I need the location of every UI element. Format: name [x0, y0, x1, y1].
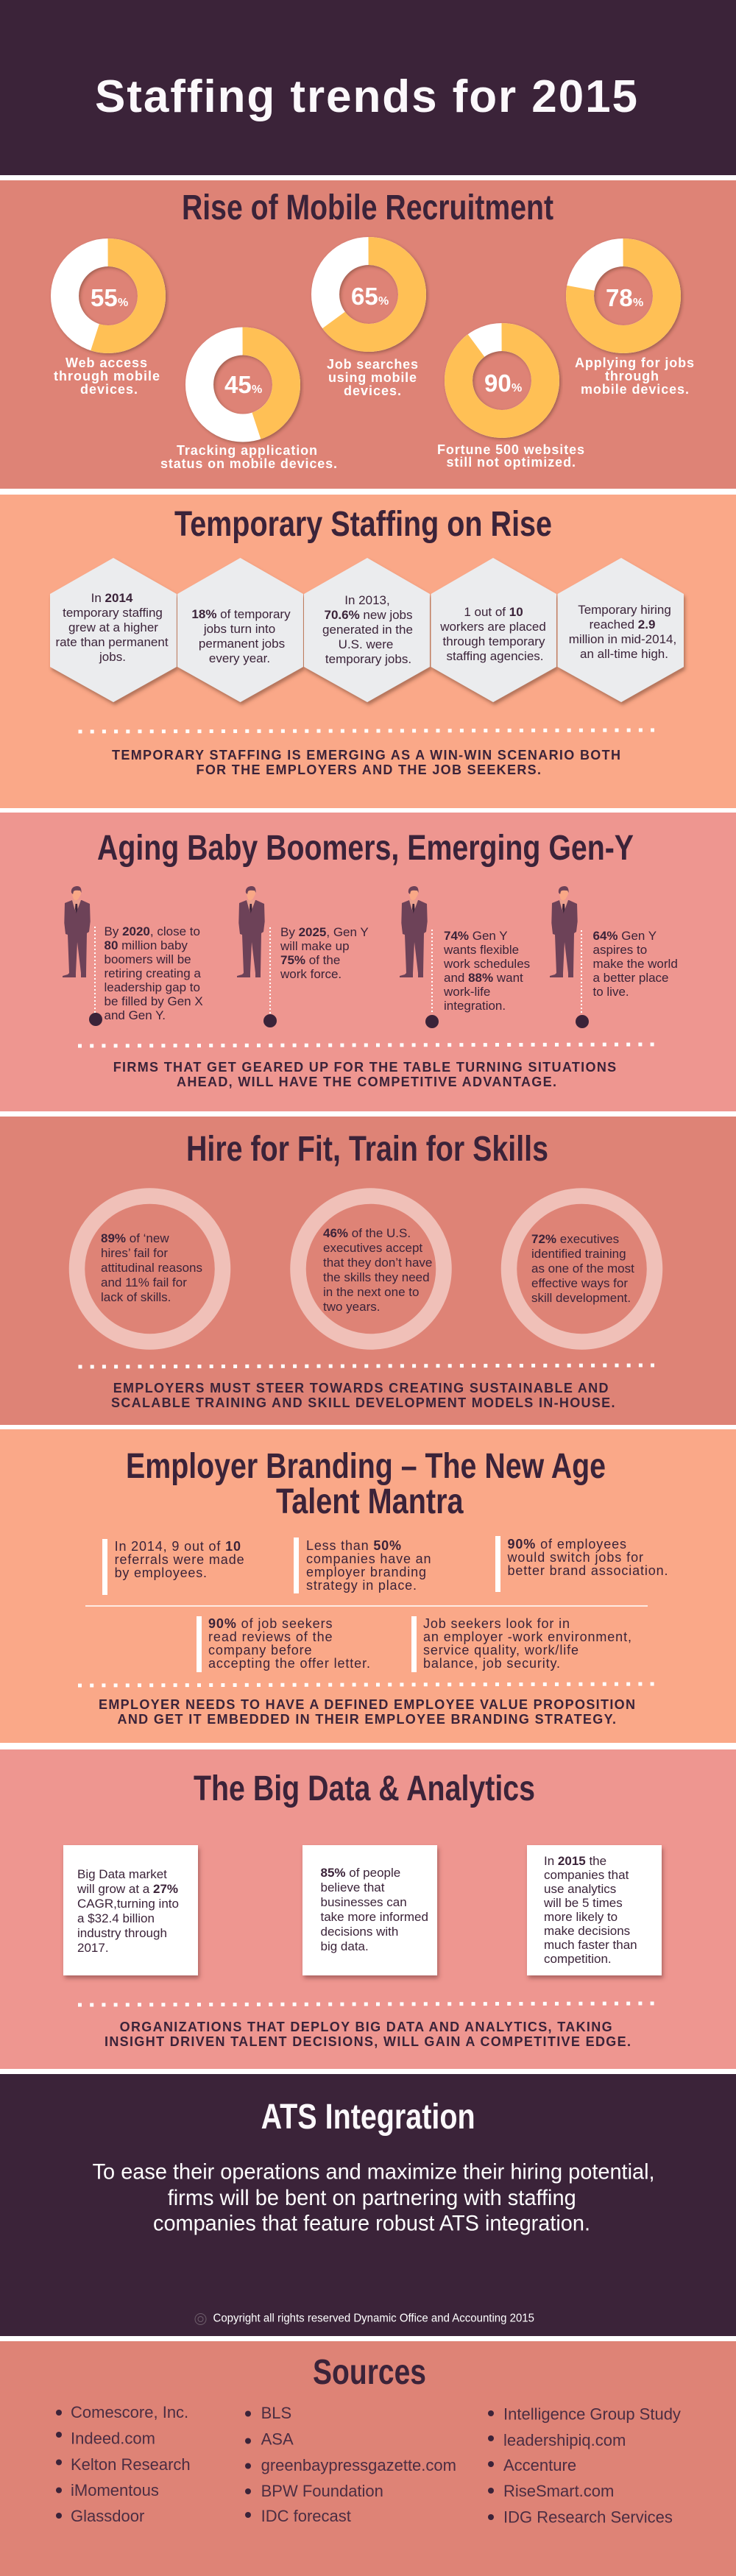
label: web access: through mobile	[54, 369, 160, 383]
hexagon: 1 out of 10: through temporary	[443, 634, 545, 648]
donut: 45 percent: %	[252, 383, 262, 396]
icon: man	[400, 886, 428, 977]
label: fortune 500: Fortune 500 websites	[437, 442, 584, 457]
ring stat: 46 percent: executives accept	[323, 1241, 422, 1255]
card: 2015 companies: will be 5 times	[543, 1896, 623, 1910]
heading: Aging Baby Boomers, Emerging Gen-Y	[97, 829, 634, 868]
person 1 with stat: be filled by Gen X	[105, 994, 203, 1008]
icon: man	[237, 886, 265, 977]
heading: Temporary Staffing on Rise	[174, 505, 552, 544]
stat: switch jobs: 90% of employees	[508, 1537, 626, 1551]
card: big data market: CAGR,turning into	[77, 1897, 179, 1911]
hexagon: 2014: temporary staffing	[63, 606, 163, 620]
source list: column 3: Intelligence Group Study	[503, 2405, 681, 2423]
panel: hire for fit	[0, 1117, 736, 1425]
card: 2015 companies: use analytics	[544, 1882, 616, 1896]
person 3 with stat: work schedules	[443, 957, 530, 971]
takeaway text: FIRMS THAT GET GEARED UP FOR THE TABLE TURNING SITUATIONS	[113, 1060, 616, 1075]
donut: 78 percent: 78	[606, 284, 633, 311]
hexagon: 1 out of 10: 1 out of 10	[464, 605, 523, 619]
label: tracking application: status on mobile devices.	[160, 456, 337, 471]
hexagon: 2.9 million: million in mid-2014,	[569, 632, 676, 646]
donut: 90 percent	[459, 337, 545, 424]
person 1 with stat	[63, 886, 203, 1026]
hexagon: 18 percent	[177, 558, 303, 702]
takeaway text: AND GET IT EMBEDDED IN THEIR EMPLOYEE BRANDING STRATEGY.	[118, 1712, 616, 1727]
hexagon: 2.9 million	[558, 558, 684, 702]
donut: 78 percent: %	[633, 297, 643, 309]
stat: job seekers look for: service quality, work/life	[423, 1643, 578, 1657]
ring stat: 89 percent	[77, 1196, 222, 1342]
stat: job seekers look for: an employer -work environment,	[423, 1630, 631, 1644]
ring stat: 89 percent: attitudinal reasons	[101, 1261, 202, 1275]
card: 85 percent: take more informed	[321, 1910, 428, 1924]
hexagon: 2014: rate than permanent	[55, 635, 169, 649]
card: 2015 companies: In 2015 the	[544, 1854, 606, 1868]
heading: Hire for Fit, Train for Skills	[186, 1130, 548, 1169]
ring stat: 89 percent: 89% of ‘new	[101, 1231, 169, 1245]
card: big data market	[63, 1845, 198, 1975]
icon: man	[550, 886, 578, 977]
card: big data market: Big Data market	[77, 1867, 167, 1881]
paragraph	[93, 2159, 655, 2236]
stat: employer branding strategy	[294, 1538, 431, 1593]
stat: employer branding strategy: strategy in place.	[306, 1578, 417, 1593]
card: 2015 companies: make decisions	[544, 1924, 630, 1938]
hexagon: 1 out of 10	[431, 558, 556, 702]
hexagon: 18 percent: permanent jobs	[199, 637, 285, 651]
stat: read reviews: read reviews of the	[208, 1630, 333, 1644]
panel: sources	[0, 2341, 736, 2576]
person 3 with stat: wants flexible	[443, 943, 519, 957]
hexagon: 2014	[50, 558, 177, 702]
person 3 with stat: integration.	[444, 999, 506, 1013]
copyright: Copyright all rights reserved Dynamic Office and Accounting 2015	[213, 2313, 534, 2325]
icon: man	[63, 886, 91, 977]
takeaway text: INSIGHT DRIVEN TALENT DECISIONS, WILL GAIN A COMPETITIVE EDGE.	[105, 2034, 631, 2049]
hexagon: 2014: In 2014	[91, 591, 133, 605]
card: 2015 companies: much faster than	[544, 1938, 637, 1952]
label: web access: devices.	[80, 382, 138, 397]
card: big data market: industry through	[77, 1926, 167, 1940]
paragraph: To ease their operations and maximize their hiring potential,	[93, 2159, 655, 2184]
ring stat: 89 percent: hires’ fail for	[101, 1246, 168, 1260]
heading: ATS Integration	[261, 2098, 475, 2137]
hexagon: 18 percent: every year.	[209, 651, 270, 665]
panel: rise of mobile recruitment	[0, 180, 736, 489]
stat: job seekers look for: balance, job security.	[423, 1656, 560, 1671]
label: job searches: Job searches	[327, 357, 418, 372]
hexagon: 18 percent: 18% of temporary	[191, 607, 291, 621]
card: 85 percent	[302, 1845, 437, 1975]
donut: 45 percent: 45	[224, 371, 252, 398]
hexagon: 1 out of 10: workers are placed	[439, 620, 546, 634]
person 3 with stat: and 88% want	[444, 971, 523, 985]
takeaway text: AHEAD, WILL HAVE THE COMPETITIVE ADVANTAGE.	[177, 1075, 556, 1089]
stat: read reviews: accepting the offer letter.	[208, 1656, 370, 1671]
heading: Employer Branding – The New Age	[126, 1447, 606, 1486]
person 2 with stat: By 2025, Gen Y	[280, 925, 369, 939]
card: big data market: will grow at a 27%	[77, 1882, 178, 1896]
label: applying for jobs: mobile devices.	[581, 382, 689, 397]
takeaway text: EMPLOYERS MUST STEER TOWARDS CREATING SUSTAINABLE AND	[113, 1381, 608, 1395]
title: Staffing trends for 2015	[95, 71, 637, 122]
label: tracking application: Tracking application	[177, 443, 317, 458]
ring stat: 72 percent: 72% executives	[531, 1232, 619, 1246]
takeaway text	[111, 1381, 615, 1410]
person 4 with stat: make the world	[593, 957, 678, 971]
stat: employer branding strategy: companies have an	[306, 1551, 431, 1566]
stat: switch jobs: would switch jobs for	[506, 1550, 643, 1565]
source list: column 1: Comescore, Inc.	[71, 2403, 188, 2421]
label: applying for jobs: through	[605, 369, 659, 383]
heading: The Big Data & Analytics	[194, 1769, 535, 1808]
paragraph: companies that feature robust ATS integration.	[153, 2211, 590, 2236]
panel: big data and analytics	[0, 1749, 736, 2069]
ring stat: 46 percent	[298, 1196, 444, 1342]
donut: 45 percent	[199, 342, 286, 428]
label: job searches: devices.	[344, 383, 401, 398]
hexagon: 70.6 percent: generated in the	[322, 623, 413, 637]
person 4 with stat	[550, 886, 678, 1028]
person 2 with stat: 75% of the	[280, 953, 340, 967]
label: tracking application	[160, 443, 337, 471]
card: 2015 companies: more likely to	[544, 1910, 618, 1924]
person 1 with stat: By 2020, close to	[105, 924, 200, 938]
hexagon: 2.9 million: reached 2.9	[590, 618, 655, 631]
hexagon: 1 out of 10: staffing agencies.	[446, 649, 543, 663]
ring stat: 72 percent: identified training	[531, 1247, 626, 1261]
source list: column 1: iMomentous	[71, 2481, 159, 2499]
ring stat: 46 percent: the skills they need	[323, 1270, 430, 1284]
ring stat: 89 percent: lack of skills.	[101, 1290, 171, 1304]
person 1 with stat: retiring creating a	[105, 966, 201, 980]
stat: job seekers look for	[411, 1616, 631, 1672]
label: job searches	[327, 357, 418, 398]
donut: 65 percent: 65	[351, 283, 378, 310]
panel: temporary staffing	[0, 495, 736, 808]
hexagon: 2014: jobs.	[99, 650, 126, 664]
source list: column 3: IDG Research Services	[503, 2508, 673, 2526]
label: job searches: using mobile	[328, 370, 417, 385]
panel: ats integration	[0, 2074, 736, 2336]
takeaway text: SCALABLE TRAINING AND SKILL DEVELOPMENT MODELS IN-HOUSE.	[111, 1395, 615, 1410]
person 4 with stat: to live.	[593, 985, 629, 999]
source list: column 2: ASA	[261, 2430, 294, 2448]
source list: column 3	[488, 2405, 681, 2526]
ring stat: 72 percent	[509, 1196, 655, 1342]
takeaway text	[105, 2020, 631, 2049]
person 2 with stat	[237, 886, 369, 1027]
ring stat: 46 percent: two years.	[323, 1300, 380, 1314]
ring stat: 46 percent: 46% of the U.S.	[323, 1226, 411, 1240]
source list: column 3: RiseSmart.com	[503, 2482, 614, 2500]
source list: column 3: leadershipiq.com	[503, 2431, 626, 2449]
stat: referrals: by employees.	[115, 1565, 207, 1580]
heading: Sources	[313, 2353, 426, 2392]
label: fortune 500	[437, 442, 584, 470]
panel: aging baby boomers	[0, 813, 736, 1111]
card: 85 percent: 85% of people	[321, 1866, 400, 1880]
donut: 55 percent	[65, 252, 152, 339]
stat: referrals	[102, 1539, 244, 1595]
ring stat: 46 percent: that they don’t have	[323, 1256, 432, 1270]
donut: 55 percent: %	[118, 297, 128, 309]
takeaway text	[113, 1060, 616, 1089]
stat: read reviews	[197, 1616, 370, 1672]
person 3 with stat: work-life	[443, 985, 490, 999]
source list: column 2: BLS	[261, 2404, 291, 2422]
panel: employer branding	[0, 1429, 736, 1743]
label: web access: Web access	[66, 355, 147, 370]
source list: column 1: Glassdoor	[71, 2507, 144, 2525]
hexagon: 2.9 million: an all-time high.	[580, 647, 668, 661]
source list: column 2: IDC forecast	[261, 2507, 351, 2525]
person 1 with stat: leadership gap to	[105, 980, 200, 994]
label: fortune 500: still not optimized.	[446, 455, 576, 470]
paragraph: firms will be bent on partnering with staffing	[168, 2186, 576, 2210]
card: big data market: a $32.4 billion	[77, 1911, 155, 1925]
source list: column 2: greenbaypressgazette.com	[261, 2456, 456, 2474]
source list: column 3: Accenture	[503, 2456, 576, 2474]
person 2 with stat: work force.	[280, 967, 342, 981]
hexagon: 70.6 percent: U.S. were	[339, 637, 393, 651]
donut: 90 percent: %	[512, 382, 522, 394]
stat: employer branding strategy: employer branding	[306, 1565, 426, 1579]
stat: referrals: In 2014, 9 out of 10	[115, 1539, 241, 1554]
person 1 with stat: boomers will be	[105, 952, 191, 966]
ring stat: 72 percent: as one of the most	[531, 1262, 634, 1275]
ring stat: 89 percent: and 11% fail for	[101, 1275, 187, 1289]
stat: switch jobs	[495, 1536, 668, 1592]
takeaway text	[112, 748, 620, 777]
stat: switch jobs: better brand association.	[508, 1563, 668, 1578]
donut: 65 percent	[325, 251, 412, 338]
person 1 with stat: 80 million baby	[105, 938, 188, 952]
card: 85 percent: big data.	[321, 1939, 369, 1953]
hexagon: 2014: grew at a higher	[68, 620, 158, 634]
label: applying for jobs	[575, 355, 694, 397]
source list: column 1	[56, 2403, 191, 2525]
ring stat: 72 percent: effective ways for	[531, 1276, 628, 1290]
stat: referrals: referrals were made	[115, 1552, 244, 1567]
card: 2015 companies	[527, 1845, 662, 1975]
person 2 with stat: will make up	[280, 939, 350, 953]
card: 85 percent: believe that	[321, 1880, 385, 1894]
heading	[126, 1447, 606, 1521]
stat: read reviews: 90% of job seekers	[208, 1616, 333, 1631]
source list: column 2	[245, 2404, 456, 2525]
stat: job seekers look for: Job seekers look for in	[423, 1616, 570, 1631]
hexagon: 70.6 percent: 70.6% new jobs	[324, 608, 413, 622]
takeaway text: EMPLOYER NEEDS TO HAVE A DEFINED EMPLOYEE VALUE PROPOSITION	[99, 1697, 635, 1712]
person 1 with stat: and Gen Y.	[105, 1008, 166, 1022]
hexagon: 2.9 million: Temporary hiring	[578, 603, 671, 617]
stat: employer branding strategy: Less than 50%	[306, 1538, 401, 1553]
heading: Rise of Mobile Recruitment	[182, 188, 553, 227]
takeaway text: FOR THE EMPLOYERS AND THE JOB SEEKERS.	[196, 762, 541, 777]
source list: column 1: Indeed.com	[71, 2429, 155, 2448]
hexagon: 70.6 percent: In 2013,	[344, 593, 390, 607]
donut: 78 percent	[580, 252, 667, 339]
card: big data market: 2017.	[77, 1941, 109, 1955]
ring stat: 46 percent: in the next one to	[323, 1285, 419, 1299]
donut: 90 percent: 90	[484, 369, 512, 397]
donut: 65 percent: %	[378, 295, 389, 308]
hexagon: 18 percent: jobs turn into	[203, 622, 275, 636]
takeaway text	[99, 1697, 635, 1727]
takeaway text: ORGANIZATIONS THAT DEPLOY BIG DATA AND ANALYTICS, TAKING	[120, 2020, 612, 2034]
ring stat: 72 percent: skill development.	[531, 1291, 631, 1305]
card: 85 percent: businesses can	[321, 1895, 407, 1909]
hexagon: 70.6 percent: temporary jobs.	[325, 652, 411, 666]
source list: column 1: Kelton Research	[71, 2455, 191, 2474]
person 3 with stat: 74% Gen Y	[444, 929, 508, 943]
hexagon: 70.6 percent	[304, 558, 430, 702]
person 4 with stat: aspires to	[593, 943, 647, 957]
donut: 55 percent: 55	[91, 284, 118, 311]
person 4 with stat: a better place	[593, 971, 669, 985]
heading: Talent Mantra	[276, 1482, 464, 1521]
card: 2015 companies: companies that	[544, 1868, 629, 1882]
person 3 with stat	[400, 886, 530, 1028]
card: 85 percent: decisions with	[321, 1925, 398, 1939]
header banner	[0, 0, 736, 175]
source list: column 2: BPW Foundation	[261, 2482, 383, 2500]
card: 2015 companies: competition.	[544, 1952, 612, 1966]
label: applying for jobs: Applying for jobs	[575, 355, 694, 370]
stat: read reviews: company before	[208, 1643, 312, 1657]
takeaway text: TEMPORARY STAFFING IS EMERGING AS A WIN-WIN SCENARIO BOTH	[112, 748, 620, 762]
person 4 with stat: 64% Gen Y	[593, 929, 657, 943]
label: web access	[54, 355, 160, 397]
